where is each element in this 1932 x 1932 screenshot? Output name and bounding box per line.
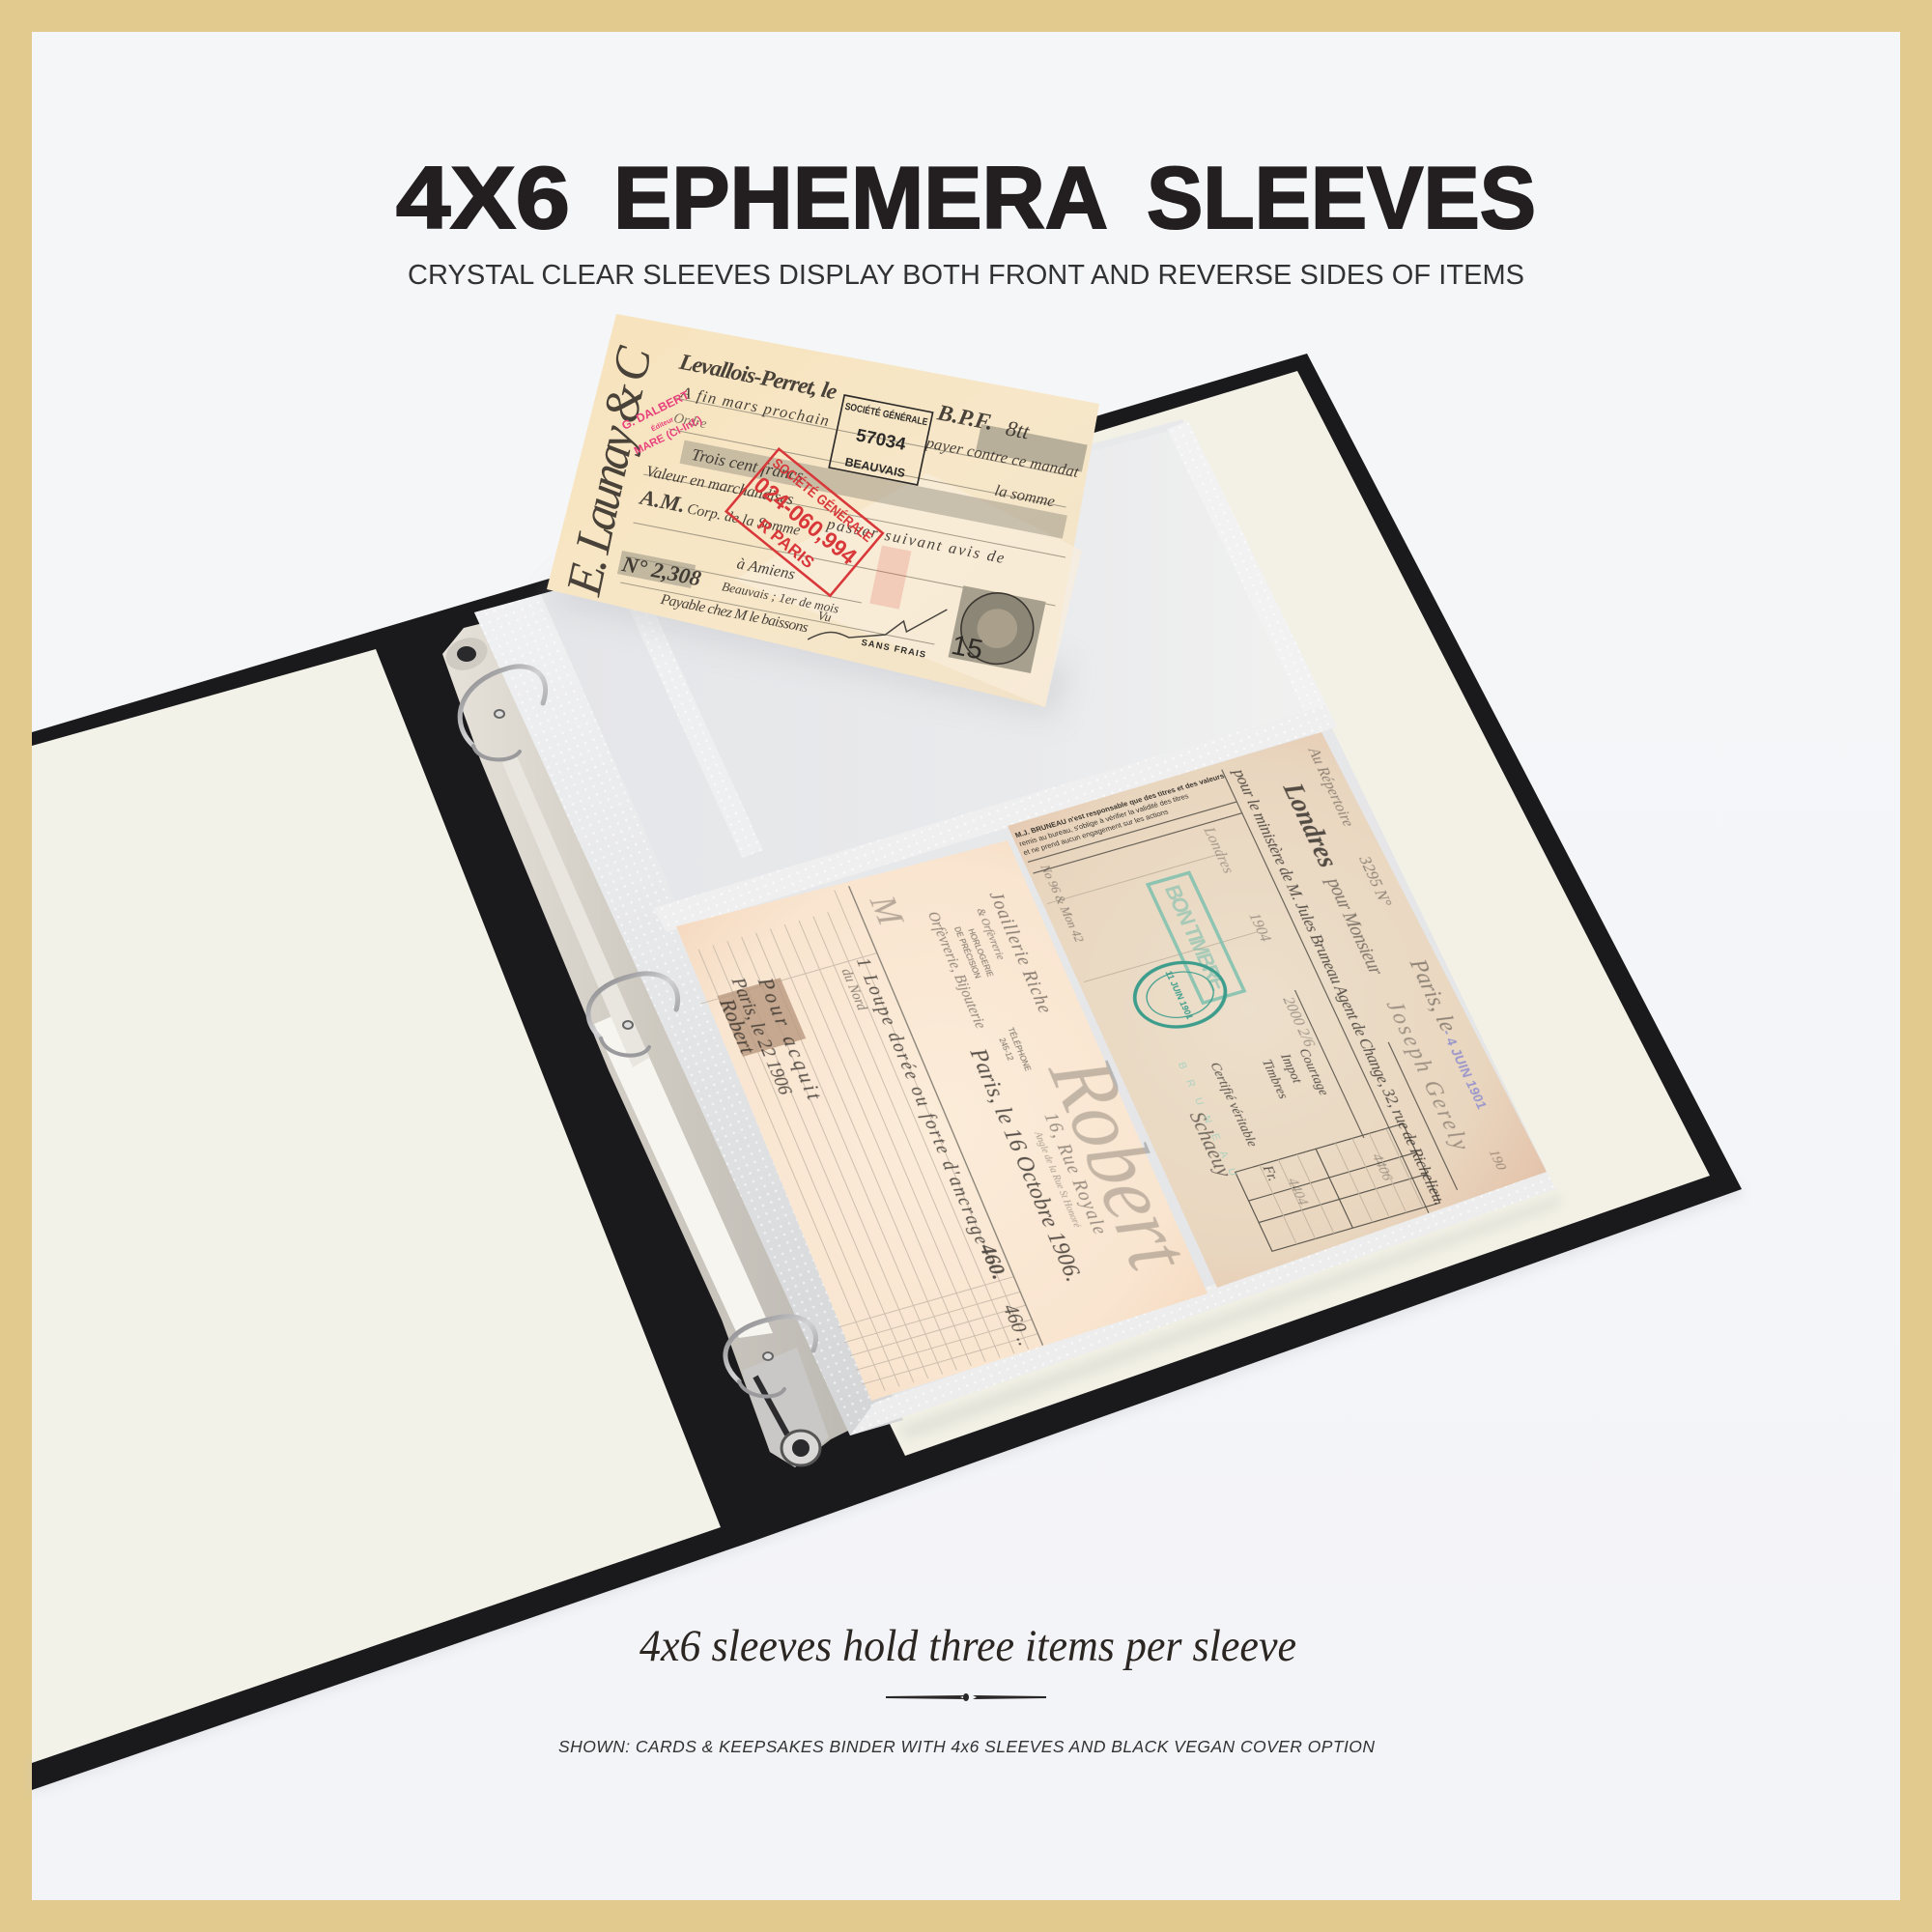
handwriting and print: Au Répertoire <box>1304 745 1356 829</box>
handwriting and print: Orfèvrerie, Bijouterie <box>924 910 989 1031</box>
pink stamp <box>619 388 704 457</box>
upper compartment <box>541 429 1325 922</box>
handwriting and print: Robert <box>714 995 761 1057</box>
faint green text: BRUNEAU <box>1176 1061 1239 1178</box>
lower beaded edge <box>850 1169 1555 1435</box>
punched edge band <box>474 594 903 1435</box>
handwriting and print: Schaeuy <box>1184 1109 1237 1179</box>
title: 4X6 <box>396 150 570 247</box>
sleeve shadow on page <box>898 1194 1565 1439</box>
sleeve body <box>474 419 1555 1435</box>
seam between pockets, left <box>618 580 763 858</box>
handwriting and print: Impot <box>1277 1052 1305 1086</box>
red bank stamp: SOCIÉTÉ GÉNÉRALE <box>769 455 876 546</box>
title <box>396 150 1536 247</box>
header fine print: remis au bureau, s'oblige à vérifier la validité des titres <box>1017 791 1190 848</box>
handwriting and print: 1904 <box>1245 911 1274 944</box>
pink stamp: MARE (Cl-Inf.) <box>633 414 704 457</box>
green rectangular stamp: BON TIMBRE <box>1159 882 1232 993</box>
handwriting and print: 245-12 <box>997 1037 1015 1062</box>
black bank stamp: 57034 <box>854 424 908 454</box>
handwriting and print: 16, Rue Royale <box>1039 1111 1110 1237</box>
right inside cover page <box>497 371 1710 1456</box>
red bank stamp: R PARIS <box>753 515 818 572</box>
left inside cover page <box>32 649 721 1763</box>
handwriting and print: 4404 <box>1284 1177 1311 1208</box>
handwriting and print: Londres <box>1200 825 1237 875</box>
pink stamp: G. DALBERT <box>619 388 692 433</box>
right receipt card <box>1008 732 1547 1288</box>
handwriting and print: Certifié véritable <box>1207 1061 1260 1149</box>
handwriting and print: 190 <box>1486 1148 1510 1172</box>
handwriting and print: Beauvais ; 1er de mois <box>721 579 840 616</box>
ring mechanism base <box>441 618 850 1467</box>
vertical company name: E. Launay & C <box>555 342 663 601</box>
brown postage stamp <box>717 978 806 1057</box>
handwriting and print: HORLOGERIE <box>966 928 995 979</box>
title: EPHEMERA <box>613 150 1108 247</box>
handwriting and print: la somme <box>993 481 1057 510</box>
handwriting and print: 8tt <box>1004 416 1033 444</box>
top grommet <box>441 632 492 676</box>
handwriting and print: Paris, le <box>1404 955 1462 1035</box>
binder <box>32 354 1745 1793</box>
handwriting and print: Valeur en marchandises <box>644 462 795 508</box>
sans frais label: SANS FRAIS <box>861 638 927 660</box>
green oval stamp <box>1123 952 1237 1037</box>
handwriting and print: 1 Loupe dorée ou forte d'ancrage <box>852 955 992 1247</box>
green oval stamp: 11 JUIN 1901 <box>1163 970 1195 1020</box>
handwriting and print: à Amiens <box>735 554 797 583</box>
handwriting and print: Joaillerie Riche <box>984 890 1055 1016</box>
right card content <box>1012 739 1534 1273</box>
postage stamp: 15 <box>949 630 985 666</box>
handwriting and print: Pour acquit <box>753 975 827 1103</box>
ring 2 <box>588 974 678 1056</box>
left card content <box>672 833 1228 1396</box>
form lines <box>620 395 1083 666</box>
left receipt card <box>672 833 1228 1401</box>
handwriting and print: 460. <box>975 1240 1013 1282</box>
loose card content <box>555 335 1093 685</box>
handwriting and print: pour Monsieur <box>1321 874 1387 978</box>
handwriting and print: payer contre ce mandat <box>923 433 1081 481</box>
ring 1 <box>460 667 546 759</box>
black bank stamp: BEAUVAIS <box>843 455 906 480</box>
handwriting and print: Paris, le 22 1906 <box>726 975 796 1097</box>
handwriting and print: 2000 2/6 <box>1279 995 1318 1049</box>
handwriting and print: Payable chez M le baissons <box>658 591 810 636</box>
handwriting and print: 460 .. <box>998 1302 1036 1349</box>
seam between pockets, right <box>1167 421 1337 734</box>
header fine print: et ne prend aucun engagement sur les actions <box>1022 808 1170 857</box>
horizontal seam <box>653 705 1337 932</box>
ruled lines <box>672 886 1043 1396</box>
handwriting and print: M <box>862 891 913 931</box>
handwriting and print <box>1021 743 1531 1267</box>
ring 3 <box>725 1317 815 1397</box>
shown note: SHOWN: CARDS & KEEPSAKES BINDER WITH 4x6 SLEEVES AND BLACK VEGAN COVER OPTION <box>558 1737 1375 1756</box>
grey redaction bars <box>617 361 1088 658</box>
handwriting and print: Joseph Gerely <box>1380 998 1474 1153</box>
handwriting and print: Corp. de la Somme <box>686 500 802 539</box>
handwriting and print: Trois cent francs <box>690 444 806 485</box>
red bank stamp: 024-060,994 <box>749 472 862 571</box>
faded red mark <box>869 546 911 610</box>
black bank stamp <box>829 395 933 485</box>
handwriting and print: Fr. <box>1259 1163 1281 1183</box>
binder shadow <box>32 1169 1745 1793</box>
loose bill of exchange card <box>547 314 1099 707</box>
header fine print: M.J. BRUNEAU n'est responsable que des titres et des valeurs <box>1013 772 1226 839</box>
handwriting and print: 3295 N° <box>1354 853 1396 908</box>
handwriting and print: passer suivant avis de <box>825 514 1006 567</box>
handwriting and print: & Orfèvrerie <box>974 907 1007 961</box>
handwriting and print: du Nord <box>838 967 870 1013</box>
handwriting and print: Timbres <box>1259 1058 1291 1101</box>
caption: 4x6 sleeves hold three items per sleeve <box>639 1621 1296 1671</box>
blue date stamp: - 4 JUIN 1901 <box>1439 1028 1491 1111</box>
shadow under loose card <box>547 570 1072 720</box>
pink stamp: Éditeur <box>649 414 675 433</box>
handwriting and print: Vu <box>816 608 833 625</box>
title: SLEEVES <box>1147 150 1536 247</box>
handwriting and print <box>614 347 1088 681</box>
sleeves <box>474 419 1555 1435</box>
handwriting and print: Angle de la Rue St Honoré <box>1032 1129 1083 1229</box>
handwriting and print: Ordre <box>672 411 709 432</box>
handwriting and print: Robert <box>1029 1046 1212 1281</box>
black bank stamp: SOCIÉTÉ GÉNÉRALE <box>844 400 929 428</box>
handwriting and print <box>693 850 1226 1388</box>
green rectangular stamp <box>1148 872 1244 1003</box>
black binder cover <box>32 354 1742 1790</box>
handwriting and print: Paris, le 16 Octobre 1906. <box>964 1044 1088 1285</box>
handwriting and print: TÉLÉPHONE <box>1006 1027 1033 1072</box>
rules and table <box>1012 759 1463 1273</box>
handwriting and print: Levallois-Perret, le <box>676 350 839 405</box>
handwriting and print: N° 2,308 <box>619 552 703 590</box>
handwriting and print: B.P.F. <box>934 400 995 436</box>
subtitle: CRYSTAL CLEAR SLEEVES DISPLAY BOTH FRONT AND REVERSE SIDES OF ITEMS <box>408 260 1524 291</box>
handwriting and print: Courtage <box>1295 1047 1331 1097</box>
handwriting and print: DE PRÉCISION <box>952 925 982 980</box>
handwriting and print: A fin mars prochain <box>679 383 831 430</box>
postage stamp <box>948 585 1046 676</box>
red bank stamp <box>726 449 883 596</box>
handwriting and print: A.M. <box>637 485 688 517</box>
handwriting and print: 4406 <box>1368 1152 1396 1183</box>
bottom clip and grommet <box>742 1348 829 1467</box>
handwriting and print: Londres <box>1276 780 1344 871</box>
handwriting and print: No 96 & Mon 42 <box>1037 863 1088 944</box>
handwriting and print: pour le ministère de M. Jules Bruneau Agent de Change, 32, rue de Richelieu. <box>1229 766 1450 1207</box>
rings <box>460 667 815 1397</box>
ornamental divider <box>886 1693 1046 1701</box>
